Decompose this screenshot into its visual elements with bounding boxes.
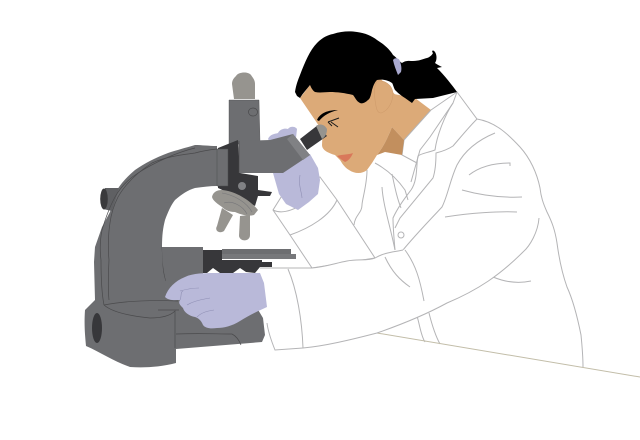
base hole xyxy=(92,313,102,343)
rear stand and base xyxy=(85,145,265,367)
face xyxy=(300,78,410,173)
hair xyxy=(295,31,457,103)
eyepiece cap xyxy=(232,72,255,99)
objective lens left xyxy=(216,208,233,232)
objective lens right xyxy=(239,215,250,240)
microscope xyxy=(85,72,320,367)
ear xyxy=(374,81,393,113)
dark mount xyxy=(218,140,272,206)
lower gloved hand xyxy=(165,273,267,328)
raised hand fingers xyxy=(268,127,297,142)
nosepiece turret xyxy=(212,190,258,216)
stage plate lower xyxy=(222,254,296,259)
neck block xyxy=(217,149,228,186)
lower sleeve xyxy=(260,218,539,350)
pivot xyxy=(238,182,246,190)
stage block xyxy=(162,247,203,281)
lips xyxy=(337,153,353,162)
lab coat body xyxy=(300,92,583,367)
coat button xyxy=(398,232,404,238)
raised sleeve xyxy=(273,177,375,268)
eyepiece ring xyxy=(316,125,327,139)
eyebrow xyxy=(317,110,338,121)
head xyxy=(295,31,457,173)
eye xyxy=(328,118,339,127)
hair tie xyxy=(393,58,401,75)
stage plate upper xyxy=(222,249,291,254)
side knob xyxy=(100,188,119,211)
neck xyxy=(372,90,431,140)
stage clamp xyxy=(203,250,272,273)
binocular head xyxy=(239,134,310,173)
eyepiece xyxy=(300,125,327,150)
eyepiece tube xyxy=(300,125,327,150)
raised hand glove xyxy=(273,154,320,210)
table edge xyxy=(377,333,640,377)
upper column xyxy=(229,100,260,145)
neck shadow xyxy=(377,127,404,155)
stand contour lines xyxy=(100,148,241,348)
